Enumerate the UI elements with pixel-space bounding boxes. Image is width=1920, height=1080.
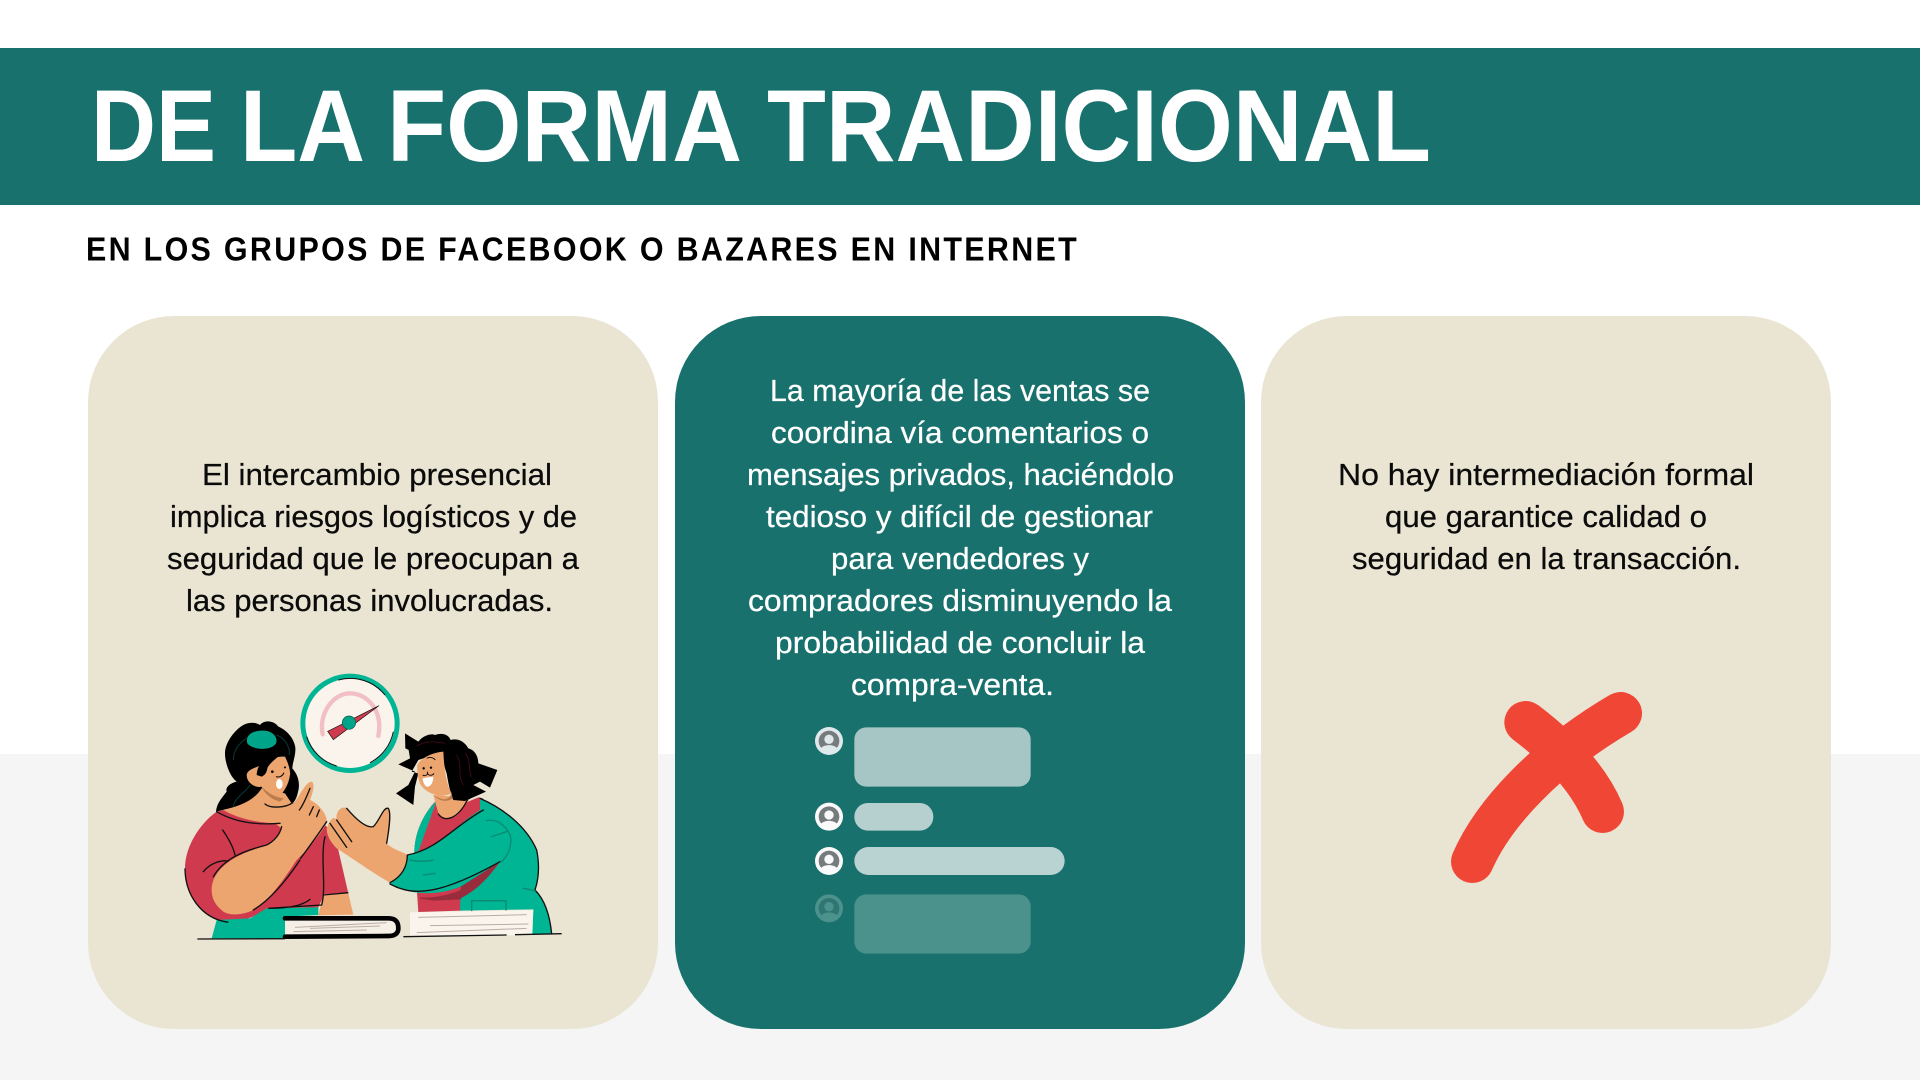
header band with title (0, 48, 1920, 205)
text: coordination via messages: mensajes privados, haciéndolo (747, 457, 1174, 492)
title: DE (91, 69, 216, 183)
text: no formal intermediation: que garantice calidad o (1385, 499, 1707, 534)
chat row 3 (815, 847, 1065, 875)
right woman neck (433, 793, 472, 818)
title: FORMA (387, 69, 742, 183)
text: in-person exchange (167, 457, 580, 618)
title: LA (240, 69, 365, 183)
chat row 2 (815, 803, 933, 831)
panel: in-person exchange (88, 316, 658, 1029)
text: in-person exchange: seguridad que le preocupan a (167, 541, 580, 576)
right woman hair (396, 733, 497, 805)
text: coordination via messages: probabilidad de concluir la (775, 625, 1146, 660)
title: TRADICIONAL (767, 69, 1431, 183)
illustration: two women talking with a gauge (185, 674, 562, 939)
text: coordination via messages (747, 373, 1174, 702)
panel: coordination via messages (675, 316, 1245, 1029)
text: coordination via messages: compradores disminuyendo la (748, 583, 1173, 618)
text: in-person exchange: El intercambio presencial (202, 457, 552, 492)
text: in-person exchange: las personas involucradas. (186, 583, 553, 618)
subtitle: EN LOS GRUPOS DE FACEBOOK O BAZARES EN INTERNET (86, 230, 1079, 268)
panel: no formal intermediation (1261, 316, 1831, 1029)
text: no formal intermediation: No hay intermediación formal (1338, 457, 1754, 492)
chat thread illustration (815, 727, 1065, 954)
figure: left woman (185, 721, 353, 938)
text: coordination via messages: La mayoría de las ventas se (770, 373, 1150, 408)
chat row 4 (815, 894, 1031, 954)
text: coordination via messages: para vendedores y (831, 541, 1090, 576)
icon: red cross (1472, 713, 1621, 862)
text: coordination via messages: tedioso y difícil de gestionar (766, 499, 1153, 534)
title (91, 69, 1431, 183)
text: no formal intermediation: seguridad en la transacción. (1352, 541, 1741, 576)
text: coordination via messages: compra-venta. (851, 667, 1054, 702)
books on table (197, 910, 562, 939)
left woman hair (216, 721, 299, 812)
text: in-person exchange: implica riesgos logísticos y de (170, 499, 577, 534)
chat row 1 (815, 727, 1031, 787)
text: coordination via messages: coordina vía comentarios o (771, 415, 1149, 450)
figure: right woman (327, 733, 552, 934)
icon: gauge (300, 674, 400, 773)
text: no formal intermediation (1338, 457, 1754, 576)
